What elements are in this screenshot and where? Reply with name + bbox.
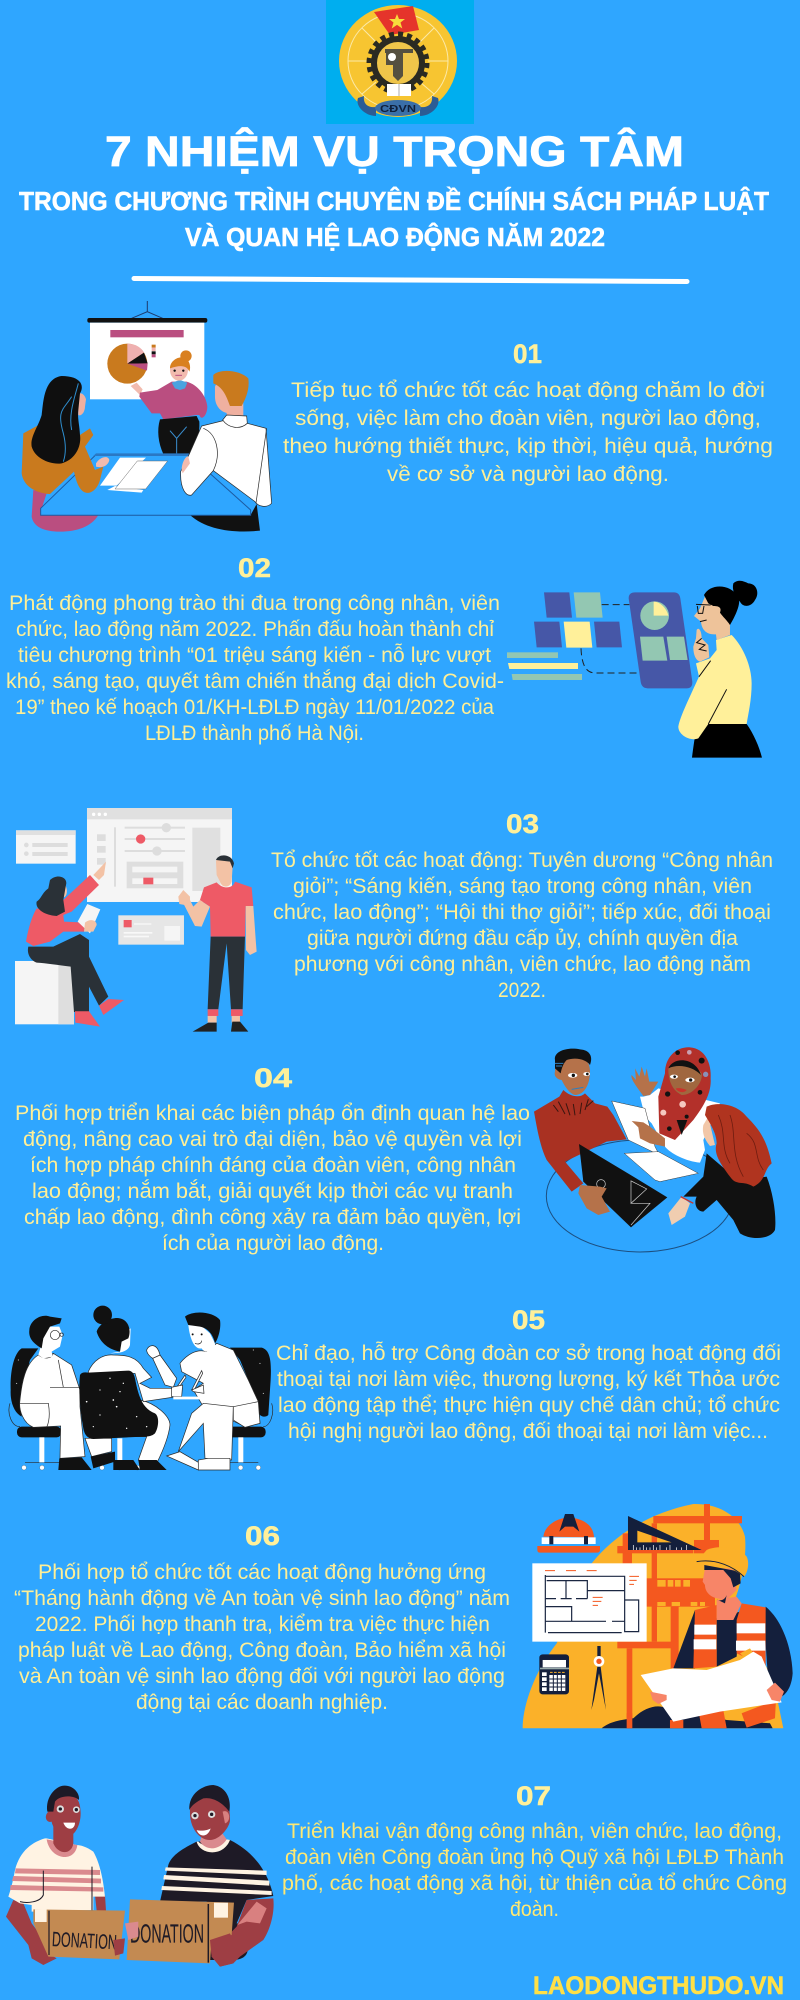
text block: task 01 <box>283 379 773 486</box>
panel: task 04 illustration <box>534 1047 775 1252</box>
text block: task 07: đoàn viên Công đoàn ủng hộ Quỹ xã hội LĐLĐ Thành <box>285 1846 784 1869</box>
subtitle: VÀ QUAN HỆ LAO ĐỘNG NĂM 2022 <box>185 222 605 252</box>
text block: task 04: động, nâng cao vai trò đại diện, bảo vệ quyền và lợi <box>23 1128 522 1151</box>
panel: task 07 illustration: DONATION <box>130 1919 204 1949</box>
text block: task 01: sống, việc làm cho đoàn viên, người lao động, <box>295 407 761 430</box>
heading: 01: 01 <box>513 339 542 369</box>
text block: task 03: giỏi”; “Sáng kiến, sáng tạo trong công nhân, viên <box>293 875 752 898</box>
panel: task 03 illustration <box>15 808 257 1032</box>
text block: task 02: Phát động phong trào thi đua trong công nhân, viên <box>9 592 500 615</box>
text block: task 04: chấp lao động, đình công xảy ra đảm bảo quyền, lợi <box>24 1206 521 1229</box>
text block: task 07: phố, các hoạt động xã hội, từ thiện của tổ chức Công <box>282 1872 787 1895</box>
panel: task 07 illustration <box>6 1785 274 1967</box>
text block: task 04: ích hợp pháp chính đáng của đoàn viên, công nhân <box>30 1154 516 1177</box>
text block: task 03 <box>271 849 773 1002</box>
text block: task 06: 2022. Phối hợp thanh tra, kiểm tra việc thực hiện <box>35 1613 490 1636</box>
text block: task 03: 2022. <box>498 979 546 1002</box>
heading: 03: 03 <box>506 809 539 839</box>
text block: task 02: 19” theo kế hoạch 01/KH-LĐLĐ ngày 11/01/2022 của <box>15 696 494 719</box>
text block: task 07 <box>282 1820 787 1921</box>
heading: 07: 07 <box>516 1781 551 1811</box>
text block: task 06: pháp luật về Lao động, Công đoàn, Bảo hiểm xã hội <box>18 1639 506 1662</box>
text block: task 03: chức, lao động”; “Hội thi thợ giỏi”; tiếp xúc, đối thoại <box>273 901 771 924</box>
subtitle <box>19 186 769 252</box>
heading: 06: 06 <box>245 1521 280 1551</box>
text block: task 04 <box>15 1102 530 1255</box>
divider rule <box>134 278 687 282</box>
icon: union logo: CĐVN <box>380 104 416 115</box>
text block: task 04: lao động; nắm bắt, giải quyết kịp thời các vụ tranh <box>32 1180 513 1203</box>
title: 7 NHIỆM VỤ TRỌNG TÂM <box>105 127 684 176</box>
text block: task 02: chức, lao động năm 2022. Phấn đấu hoàn thành chỉ <box>16 618 494 641</box>
panel: task 01 illustration <box>22 301 272 532</box>
footer: website: LAODONGTHUDO.VN <box>533 1972 784 2000</box>
text block: task 01: Tiếp tục tổ chức tốt các hoạt động chăm lo đời <box>291 379 765 402</box>
text block: task 02: LĐLĐ thành phố Hà Nội. <box>145 722 364 745</box>
panel: task 05 illustration <box>9 1306 273 1470</box>
text block: task 04: Phối hợp triển khai các biện pháp ổn định quan hệ lao <box>15 1102 530 1125</box>
text block: task 02: tiêu chương trình “01 triệu sáng kiến - nỗ lực vượt <box>18 644 491 667</box>
text block: task 05: Chỉ đạo, hỗ trợ Công đoàn cơ sở trong hoạt động đối <box>276 1342 781 1365</box>
text block: task 06: Phối hợp tổ chức tốt các hoạt động hưởng ứng <box>38 1561 486 1584</box>
text block: task 02: khó, sáng tạo, quyết tâm chiến thắng đại dịch Covid- <box>6 670 504 693</box>
text block: task 03: Tổ chức tốt các hoạt động: Tuyên dương “Công nhân <box>271 849 773 872</box>
text block: task 05 <box>276 1342 781 1443</box>
text block: task 03: phương với công nhân, viên chức, lao động năm <box>294 953 751 976</box>
text block: task 01: theo hướng thiết thực, kịp thời, hiệu quả, hướng <box>283 435 773 458</box>
heading: 04: 04 <box>254 1063 292 1093</box>
text block: task 05: hội nghị người lao động, đối thoại tại nơi làm việc... <box>288 1420 768 1443</box>
heading: 05: 05 <box>512 1305 545 1335</box>
panel: task 02 illustration <box>507 581 762 758</box>
text block: task 02 <box>6 592 504 745</box>
text block: task 05: lao động tập thể; thực hiện quy chế dân chủ; tổ chức <box>278 1394 780 1417</box>
text block: task 07: đoàn. <box>510 1898 559 1921</box>
subtitle: TRONG CHƯƠNG TRÌNH CHUYÊN ĐỀ CHÍNH SÁCH PHÁP LUẬT <box>19 186 769 216</box>
icon: union logo <box>326 0 474 124</box>
panel: task 07 illustration: DONATION <box>51 1928 118 1954</box>
text block: task 04: ích của người lao động. <box>162 1232 384 1255</box>
text block: task 07: Triển khai vận động công nhân, viên chức, lao động, <box>287 1820 782 1843</box>
heading: 02: 02 <box>238 553 271 583</box>
text block: task 06: “Tháng hành động về An toàn vệ sinh lao động” năm <box>14 1587 510 1610</box>
panel: task 06 illustration <box>523 1504 793 1728</box>
text block: task 06 <box>14 1561 510 1714</box>
text block: task 05: thoại tại nơi làm việc, thương lượng, ký kết Thỏa ước <box>277 1368 780 1391</box>
text block: task 01: về cơ sở và người lao động. <box>387 463 669 486</box>
text block: task 03: giữa người đứng đầu cấp ủy, chính quyền địa <box>307 927 738 950</box>
text block: task 06: động tại các doanh nghiệp. <box>136 1691 388 1714</box>
text block: task 06: và An toàn vệ sinh lao động đối với người lao động <box>19 1665 505 1688</box>
